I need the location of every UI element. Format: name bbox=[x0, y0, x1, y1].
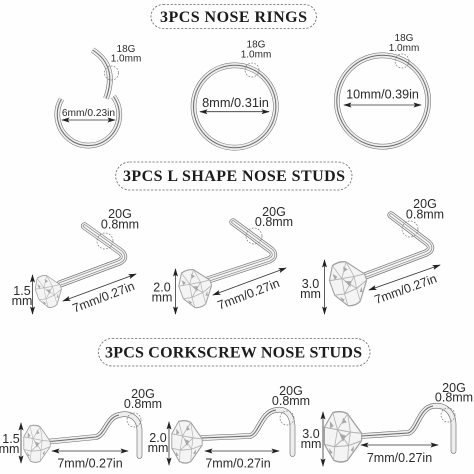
gem size arrow bbox=[20, 423, 22, 463]
corkscrew stud 3.0mm bbox=[301, 381, 473, 466]
corkscrew stud 1.5mm bbox=[0, 387, 162, 470]
10mm nose ring bbox=[337, 33, 428, 147]
gauge label: 0.8mm bbox=[272, 394, 310, 408]
gem size label: mm bbox=[148, 441, 168, 455]
gem bbox=[325, 255, 373, 310]
gem size label: 1.5 bbox=[2, 432, 20, 446]
gem bbox=[324, 412, 362, 462]
length label: 7mm/0.27in bbox=[57, 456, 123, 470]
length label: 7mm/0.27in bbox=[373, 271, 439, 307]
length arrow bbox=[369, 265, 440, 290]
diameter label: 6mm/0.23in bbox=[62, 108, 115, 119]
diameter arrow bbox=[62, 119, 115, 121]
heading: 3PCS CORKSCREW NOSE STUDS: 3PCS CORKSCREW NOSE STUDS bbox=[105, 344, 362, 362]
gem size label: mm bbox=[12, 294, 32, 308]
wire gauge callout bbox=[246, 228, 262, 244]
wire gauge callout bbox=[280, 411, 294, 425]
gauge label: 20G bbox=[108, 207, 132, 221]
gem size arrow bbox=[324, 260, 326, 314]
length label: 7mm/0.27in bbox=[216, 276, 282, 313]
L-shape stud 3.0mm bbox=[300, 197, 444, 314]
length arrow bbox=[361, 444, 438, 446]
gem size label: mm bbox=[301, 437, 321, 451]
gem bbox=[24, 425, 50, 462]
gem size label: mm bbox=[300, 287, 321, 301]
gem bbox=[32, 271, 66, 311]
wire gauge callout bbox=[245, 63, 259, 77]
wire gauge callout bbox=[441, 408, 455, 422]
gem size arrow bbox=[322, 412, 324, 466]
gauge label: 0.8mm bbox=[255, 215, 293, 229]
corkscrew stud 2.0mm bbox=[148, 384, 310, 470]
wire gauge callout bbox=[395, 54, 409, 68]
gem size arrow bbox=[168, 422, 170, 465]
gem size label: 3.0 bbox=[302, 427, 320, 441]
6mm hinged nose ring bbox=[57, 44, 141, 146]
length arrow bbox=[205, 450, 279, 452]
gauge label: 0.8mm bbox=[435, 390, 473, 404]
gauge label: 1.0mm bbox=[389, 43, 419, 54]
L-shape stud 2.0mm bbox=[152, 205, 293, 314]
diameter arrow bbox=[344, 104, 421, 106]
gem size arrow bbox=[32, 275, 34, 314]
gauge label: 1.0mm bbox=[241, 50, 271, 60]
heading: 3PCS NOSE RINGS: 3PCS NOSE RINGS bbox=[160, 9, 307, 26]
gem size label: 3.0 bbox=[302, 277, 319, 291]
gauge label: 18G bbox=[395, 33, 414, 44]
gem size label: 2.0 bbox=[149, 431, 167, 445]
gem bbox=[172, 421, 202, 463]
wire gauge callout bbox=[104, 66, 118, 80]
length arrow bbox=[63, 274, 136, 301]
heading: 3PCS L SHAPE NOSE STUDS bbox=[116, 162, 352, 190]
heading: 3PCS L SHAPE NOSE STUDS: 3PCS L SHAPE NOSE STUDS bbox=[123, 168, 345, 185]
length label: 7mm/0.27in bbox=[71, 279, 137, 316]
8mm nose ring bbox=[194, 40, 276, 148]
gauge label: 20G bbox=[442, 381, 466, 395]
gem size label: 2.0 bbox=[153, 280, 171, 294]
gauge label: 0.8mm bbox=[124, 397, 162, 411]
gem size arrow bbox=[174, 269, 176, 314]
gem bbox=[175, 264, 217, 312]
gauge label: 1.0mm bbox=[111, 54, 141, 64]
gem size label: mm bbox=[152, 290, 172, 304]
heading: 3PCS NOSE RINGS bbox=[151, 4, 316, 28]
length arrow bbox=[213, 268, 286, 295]
diameter arrow bbox=[200, 111, 269, 113]
wire gauge callout bbox=[402, 221, 418, 237]
length arrow bbox=[52, 450, 128, 452]
length label: 7mm/0.27in bbox=[205, 456, 271, 470]
gauge label: 20G bbox=[413, 197, 437, 211]
gem size label: 1.5 bbox=[13, 284, 31, 298]
diameter label: 8mm/0.31in bbox=[202, 95, 269, 110]
gauge label: 20G bbox=[262, 205, 286, 219]
gauge label: 0.8mm bbox=[101, 218, 139, 232]
length label: 7mm/0.27in bbox=[367, 451, 432, 465]
wire gauge callout bbox=[127, 413, 141, 427]
heading: 3PCS CORKSCREW NOSE STUDS bbox=[98, 338, 370, 366]
gauge label: 20G bbox=[131, 387, 155, 401]
gauge label: 0.8mm bbox=[406, 208, 444, 222]
L-shape stud 1.5mm bbox=[12, 207, 139, 316]
gauge label: 20G bbox=[279, 384, 303, 398]
gauge label: 18G bbox=[247, 40, 266, 50]
gauge label: 18G bbox=[117, 44, 136, 55]
diameter label: 10mm/0.39in bbox=[346, 88, 419, 102]
wire gauge callout bbox=[97, 233, 113, 249]
